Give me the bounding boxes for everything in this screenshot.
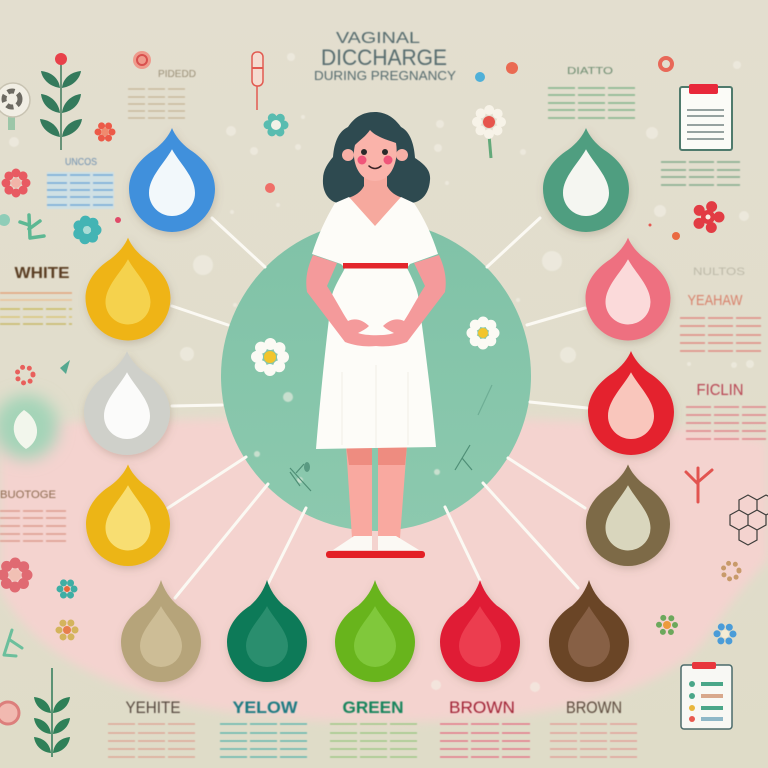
label: right ficlin: FICLIN — [696, 382, 744, 399]
daisy right on circle — [472, 322, 494, 344]
white dress — [312, 197, 438, 449]
label: bottom green: GREEN — [342, 698, 404, 717]
icon: red large flower — [697, 206, 719, 228]
icon: green sprig lower — [4, 630, 22, 656]
icon: teal blob edge — [0, 214, 10, 226]
icon: small red rosette top — [133, 51, 151, 69]
drop: pale yellow — [86, 464, 170, 566]
icon: flower with stem top right — [477, 110, 501, 158]
icon: red flower left — [6, 173, 26, 193]
label: bottom yellow: YELOW — [232, 698, 298, 717]
drop: olive — [586, 464, 670, 566]
hair — [323, 112, 430, 203]
icon: red rosette left lower — [3, 563, 27, 587]
dress pleats — [342, 365, 408, 448]
face — [342, 130, 408, 181]
icon: medical chart card — [681, 662, 732, 729]
daisy left on circle — [257, 344, 283, 370]
label: top left: PIDEDD — [158, 69, 196, 80]
shoes and base bar — [326, 536, 425, 558]
text block: right upper — [661, 162, 740, 185]
icon: red dots right — [648, 224, 680, 240]
icon: red small flower top — [506, 62, 518, 74]
label: bottom brown red: BROWN — [449, 698, 515, 717]
icon: colorful flower — [659, 617, 675, 633]
text block: bottom brown — [550, 724, 638, 757]
text block: bottom yellow — [220, 724, 308, 757]
title: VAGINAL — [336, 30, 420, 47]
text block: bottom red — [440, 724, 530, 757]
icon: red flower small — [98, 125, 112, 139]
icon: leafy plant bottom left — [34, 668, 70, 757]
sprigs on circle — [290, 385, 492, 491]
icon: red flower top far right — [660, 58, 672, 70]
icon: red dot flower — [265, 183, 275, 193]
text block: right yellow — [680, 318, 762, 351]
drop: bright red — [588, 351, 674, 455]
icon: capsule — [252, 52, 263, 110]
icon: blue flower — [717, 626, 733, 642]
text block: top left — [128, 89, 187, 118]
drop: green white — [543, 128, 629, 232]
text block: right ficlin — [686, 407, 766, 439]
drop: red — [440, 580, 520, 682]
drop: grey white — [84, 351, 170, 455]
title: DURING PREGNANCY — [314, 68, 456, 83]
text block: top right — [548, 88, 636, 118]
icon: clipboard — [680, 84, 732, 150]
label: left lower: BUOTOGE — [0, 489, 56, 501]
icon: red heart dot — [115, 217, 121, 223]
label: right pale: NULTOS — [693, 266, 745, 278]
icon: teal flower lower — [60, 582, 74, 596]
icon: small red flower left mid — [17, 367, 33, 383]
icon: pink outline flower — [0, 702, 19, 724]
icon: glowing leaf circle — [0, 395, 58, 459]
arms and hands — [306, 255, 446, 346]
woman figure — [306, 112, 446, 558]
text block: left lower — [0, 511, 67, 541]
red belt — [343, 263, 408, 268]
title — [314, 30, 456, 83]
icon: mixed flower right lower — [723, 563, 739, 579]
drop: tan — [121, 580, 201, 682]
connector lines — [168, 218, 587, 598]
icon: round button — [0, 83, 30, 130]
icon: teal flower top — [268, 117, 284, 133]
title: DICCHARGE — [321, 45, 447, 70]
icon: green sprig — [20, 215, 44, 238]
drop: blue — [129, 128, 215, 232]
icon: small teal sprig left mid — [60, 360, 70, 374]
label: bottom brown: BROWN — [566, 698, 622, 717]
text block: bottom white — [108, 724, 197, 757]
pink lower background area — [0, 418, 768, 722]
legs — [346, 445, 407, 538]
icon: leafy plant top left — [40, 53, 82, 150]
label: left blue: UNCOS — [65, 157, 97, 168]
neck and chest — [348, 176, 403, 228]
drop: dark green — [227, 580, 307, 682]
drop: yellow — [86, 238, 170, 340]
central green circle — [221, 221, 531, 531]
icon: teal flower — [78, 221, 96, 239]
icon: yellow flower lower — [59, 622, 75, 638]
icon: red branch right — [686, 468, 712, 502]
drop: lime green — [335, 580, 415, 682]
drop: brown — [549, 580, 629, 682]
label: bottom vehite: YEHITE — [126, 698, 180, 717]
label: right yellow: YEAHAW — [688, 292, 743, 309]
text block: left blue — [47, 172, 114, 209]
icon: blue small flower — [475, 72, 485, 82]
icon: hexagon honeycomb — [730, 495, 768, 545]
label: top right: DIATTO — [567, 66, 613, 77]
text block: bottom green — [330, 724, 418, 757]
text block: left white — [0, 293, 72, 324]
drop: pink — [586, 238, 670, 340]
label: white left: WHITE — [14, 265, 70, 282]
